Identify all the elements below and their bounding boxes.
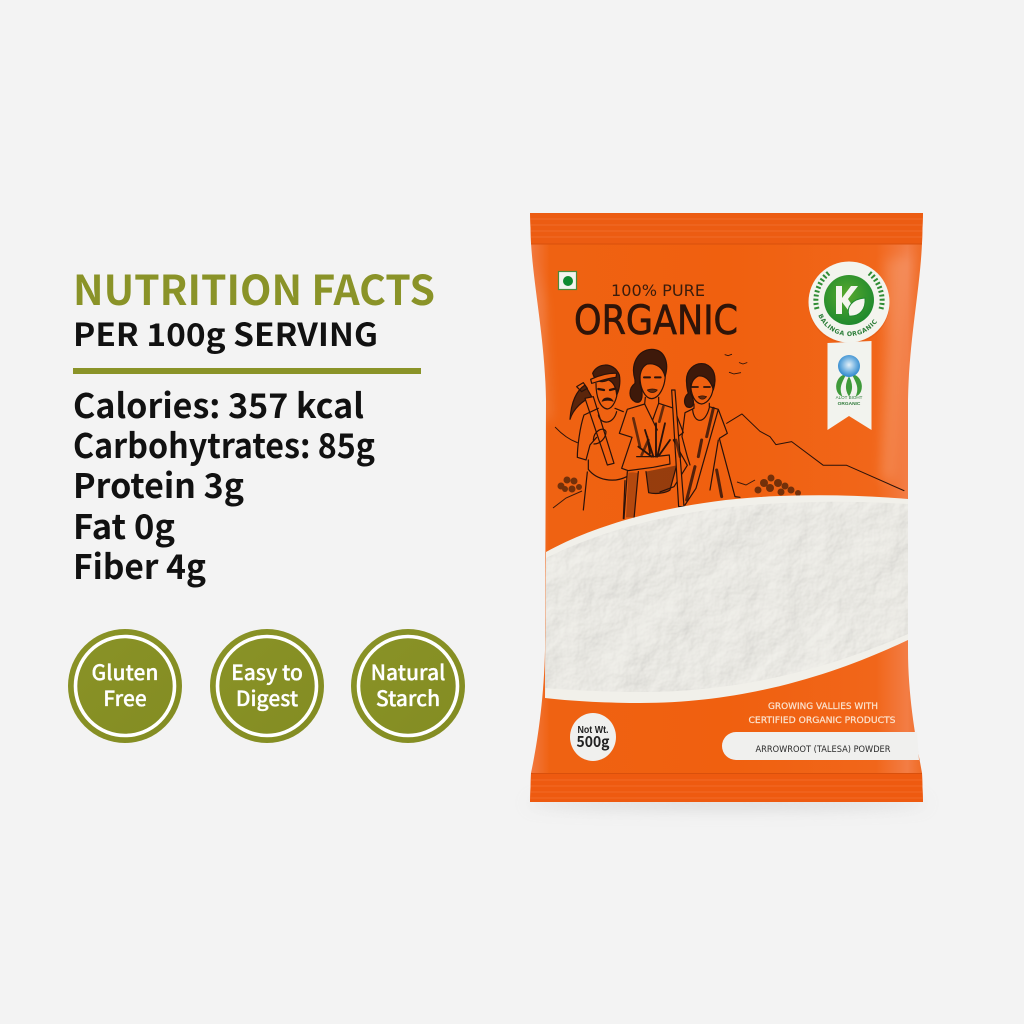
net weight badge: Not Wt. xyxy=(578,724,609,736)
badge: easy to digest: Easy to xyxy=(231,657,303,687)
top crimp seal xyxy=(528,213,926,244)
certification seal K: BALINGA ORGANIC xyxy=(818,314,877,336)
farmer woman right xyxy=(682,364,740,505)
farmer man xyxy=(570,365,627,519)
certification seal K xyxy=(808,262,890,342)
nutrition list: Protein 3g xyxy=(73,459,244,508)
product bag xyxy=(530,213,923,802)
nutrition list: Calories: 357 kcal xyxy=(73,379,364,428)
nutrition list xyxy=(73,379,375,589)
badge: easy to digest xyxy=(210,629,324,743)
title divider rule xyxy=(73,368,421,374)
flour window xyxy=(545,495,908,703)
badge: natural starch: Natural xyxy=(371,657,445,687)
bushes xyxy=(553,474,801,508)
badge: natural starch: Starch xyxy=(376,683,440,713)
title: nutrition facts: NUTRITION FACTS xyxy=(73,257,435,317)
subtitle: per 100g serving: PER 100g SERVING xyxy=(73,310,378,356)
ribbon logo xyxy=(828,341,872,430)
net weight badge: 500g xyxy=(576,731,610,752)
ribbon logo: ORGANIC xyxy=(838,401,861,407)
label: 100% pure: 100% PURE xyxy=(611,281,705,300)
ribbon logo: ALOT BIOHT xyxy=(836,395,863,400)
badge: gluten free: Free xyxy=(103,683,147,713)
mountain line and birds xyxy=(555,354,904,491)
tagline: GROWING VALLIES WITH xyxy=(768,702,878,712)
line illustration: farmers xyxy=(570,349,740,519)
tagline: CERTIFIED ORGANIC PRODUCTS xyxy=(748,716,896,726)
badge: easy to digest: Digest xyxy=(236,683,298,713)
tagline xyxy=(748,702,896,726)
nutrition list: Fat 0g xyxy=(73,500,175,549)
product name pill: ARROWROOT (TALESA) POWDER xyxy=(756,745,891,755)
badge: natural starch xyxy=(351,629,465,743)
farmer woman centre xyxy=(619,349,687,519)
bag shadow xyxy=(527,797,927,809)
bag body xyxy=(530,213,923,802)
veg mark xyxy=(558,272,576,290)
badge: gluten free: Gluten xyxy=(92,657,158,687)
product name pill xyxy=(722,732,919,760)
net weight badge xyxy=(570,713,616,761)
gloss highlights xyxy=(534,255,912,480)
bottom crimp seal xyxy=(528,773,926,802)
label: organic: ORGANIC xyxy=(574,298,738,344)
nutrition list: Fiber 4g xyxy=(73,540,206,589)
badge: gluten free xyxy=(68,629,182,743)
nutrition list: Carbohytrates: 85g xyxy=(73,419,375,468)
